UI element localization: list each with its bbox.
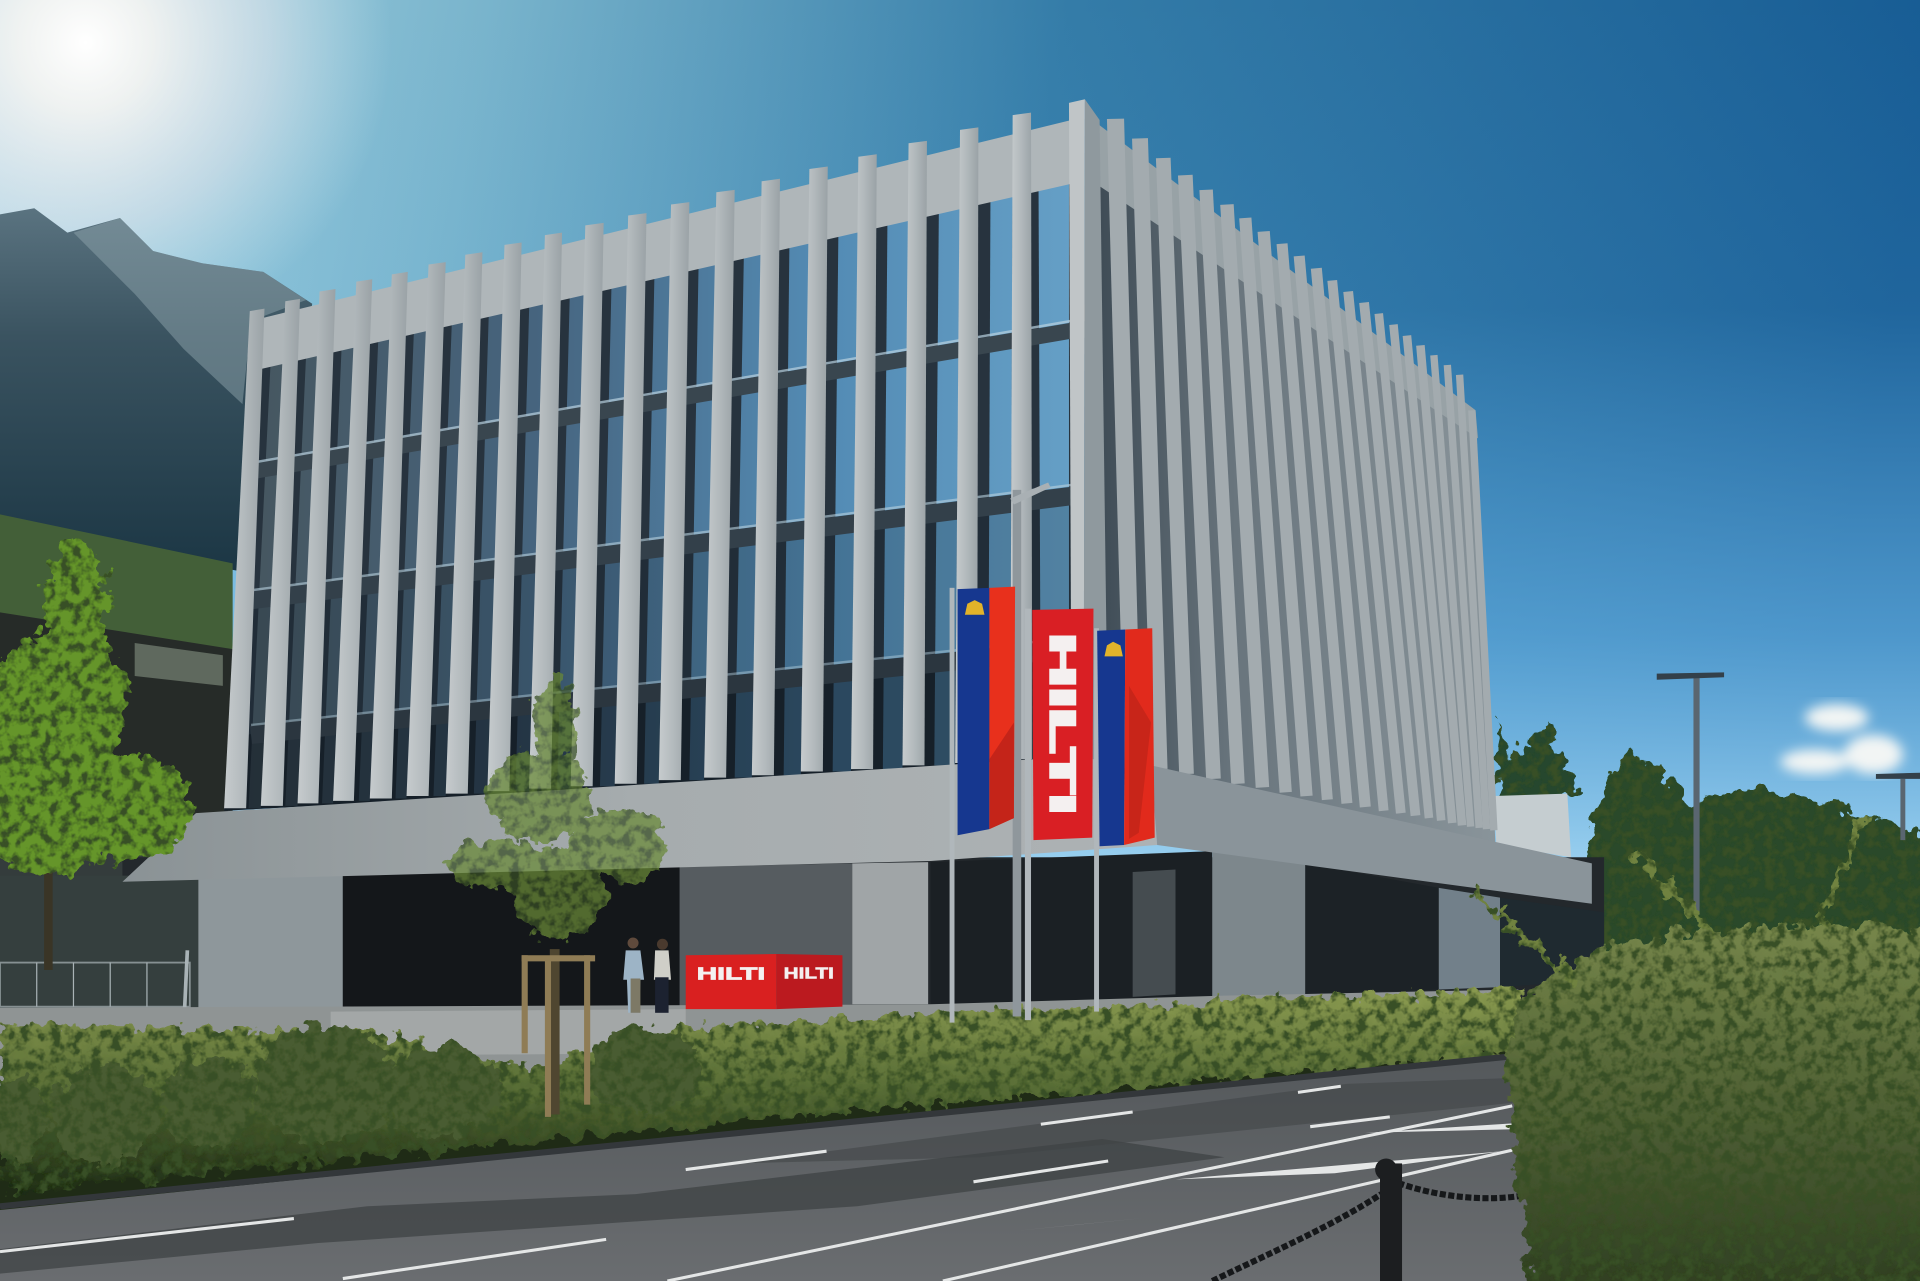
- sidewalk and steps: [0, 990, 1518, 1212]
- mountain: [0, 208, 312, 576]
- cube logo right: HILTI: [784, 966, 834, 983]
- ground floor: [0, 851, 1604, 1016]
- crown: [1104, 642, 1123, 656]
- people: [623, 937, 671, 1013]
- small tree: [447, 676, 667, 941]
- lower floor shading: [245, 496, 1071, 735]
- tree stakes and trunk: [522, 949, 595, 1117]
- podium band: [122, 757, 1592, 904]
- building: corner pier: [1069, 99, 1108, 767]
- green shed left: [0, 514, 233, 1016]
- clouds: [1780, 704, 1903, 774]
- cube logo left: HILTI: [697, 964, 765, 984]
- rear low building: [1494, 794, 1571, 857]
- floor bands: [251, 321, 1071, 735]
- building: left facade windows: [224, 127, 1071, 811]
- road: [0, 1056, 1592, 1281]
- flag: HILTI centre: [1032, 609, 1093, 840]
- flag: Liechtenstein right: [1097, 628, 1155, 846]
- glass strips: [249, 142, 1069, 808]
- building: right facade: [1096, 119, 1496, 863]
- hedge bush right foreground: [1476, 814, 1920, 1281]
- hedge: [0, 990, 1524, 1194]
- flag: HILTI centre: HILTI: [1043, 633, 1083, 814]
- road markings: [0, 1086, 1518, 1281]
- HILTI cube sign: [686, 954, 842, 1009]
- left tree: [0, 541, 192, 970]
- background trees on the right: [1496, 723, 1920, 980]
- chain barrier: [1212, 1159, 1524, 1281]
- street lamp right: [1657, 672, 1920, 915]
- building: left facade fins: [224, 113, 1032, 808]
- left fence: [0, 950, 190, 1056]
- flag poles and lamp: [950, 483, 1099, 1023]
- building: top parapet: [251, 120, 1071, 370]
- crown: [965, 600, 984, 615]
- flag: Liechtenstein left: [958, 587, 1015, 835]
